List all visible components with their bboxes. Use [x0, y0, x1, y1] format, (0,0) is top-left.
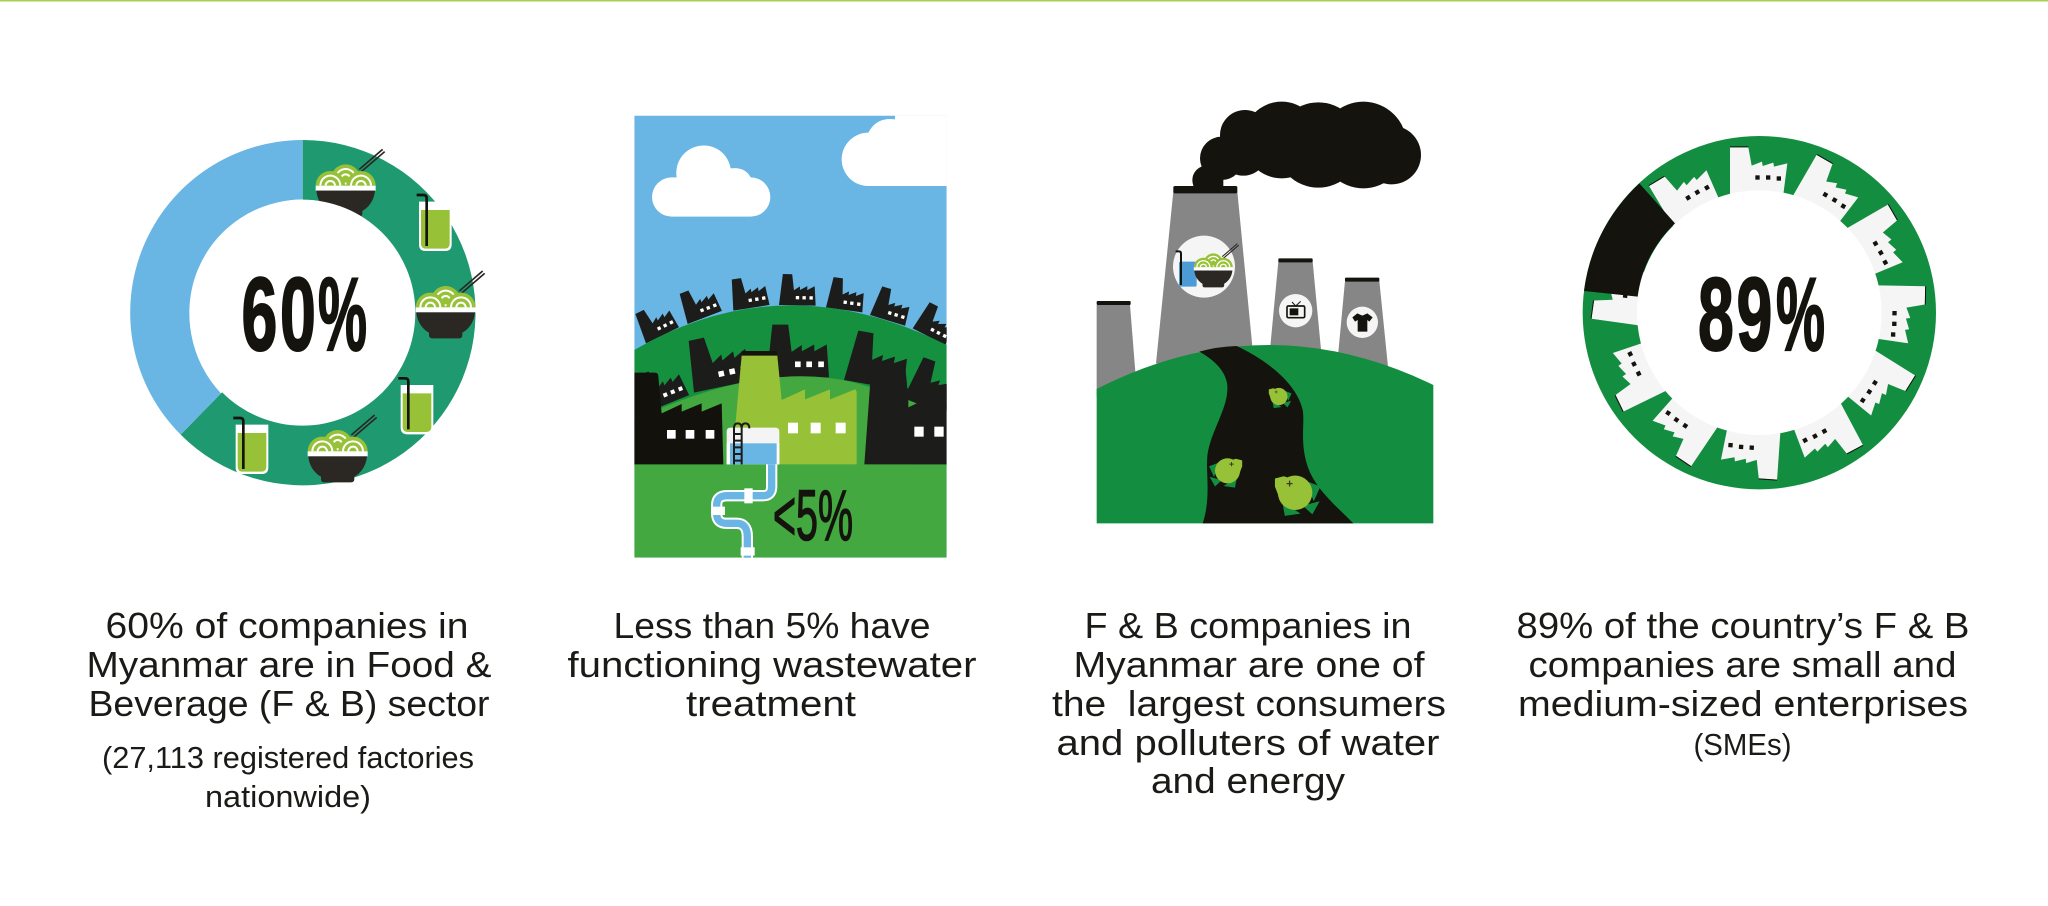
big number 89%: 8 [1698, 257, 1734, 373]
caption: F and B companies: Myanmar are one of [1074, 644, 1425, 685]
caption: less than 5%: Less than 5% have [614, 605, 930, 646]
big number 89%: % [1776, 256, 1825, 372]
caption: 89% of companies: companies are small and [1528, 644, 1956, 685]
big number 60%: 0 [280, 257, 316, 373]
caption: 60% of companies: Myanmar are in Food & [86, 644, 492, 685]
caption: 60% of companies: 60% of companies in [106, 605, 468, 646]
caption: 60% of companies [86, 605, 492, 814]
big number 60% [242, 256, 367, 373]
panel: 60% food and beverage [86, 140, 492, 814]
big number 89%: 9 [1736, 257, 1772, 373]
caption: less than 5%: functioning wastewater [568, 644, 976, 685]
caption: less than 5%: treatment [686, 683, 856, 724]
caption: F and B companies [1052, 605, 1446, 801]
caption: 60% of companies: nationwide) [205, 779, 371, 814]
caption: F and B companies: and polluters of water [1056, 722, 1440, 763]
caption: 60% of companies: Beverage (F & B) sector [88, 683, 490, 724]
illustration: smokestacks, hill and polluted river [1097, 102, 1433, 523]
panel: consumers and polluters [1097, 102, 1433, 523]
donut chart: 60% share [130, 140, 485, 485]
caption: F and B companies: F & B companies in [1084, 605, 1412, 646]
big number 60%: % [318, 256, 367, 372]
label <5%: <5% [773, 477, 853, 556]
caption: 89% of companies: (SMEs) [1694, 727, 1792, 762]
caption: F and B companies: and energy [1151, 760, 1346, 801]
caption: 89% of companies: 89% of the country’s F & B [1516, 605, 1970, 646]
caption: F and B companies: the largest consumers [1052, 683, 1446, 724]
caption: 89% of companies [1516, 605, 1970, 762]
donut chart: 89% share with factories [1583, 136, 1936, 489]
big number 60%: 6 [242, 257, 277, 373]
big number 89% [1698, 256, 1825, 373]
top accent line [0, 0, 2048, 2]
panel: 89% SMEs [1516, 136, 1970, 762]
panel: wastewater treatment [568, 113, 976, 724]
caption: 60% of companies: (27,113 registered factories [102, 740, 474, 775]
illustration: factories on hills with pipe [632, 113, 966, 560]
caption: 89% of companies: medium-sized enterprises [1518, 683, 1968, 724]
caption: less than 5% [568, 605, 976, 724]
